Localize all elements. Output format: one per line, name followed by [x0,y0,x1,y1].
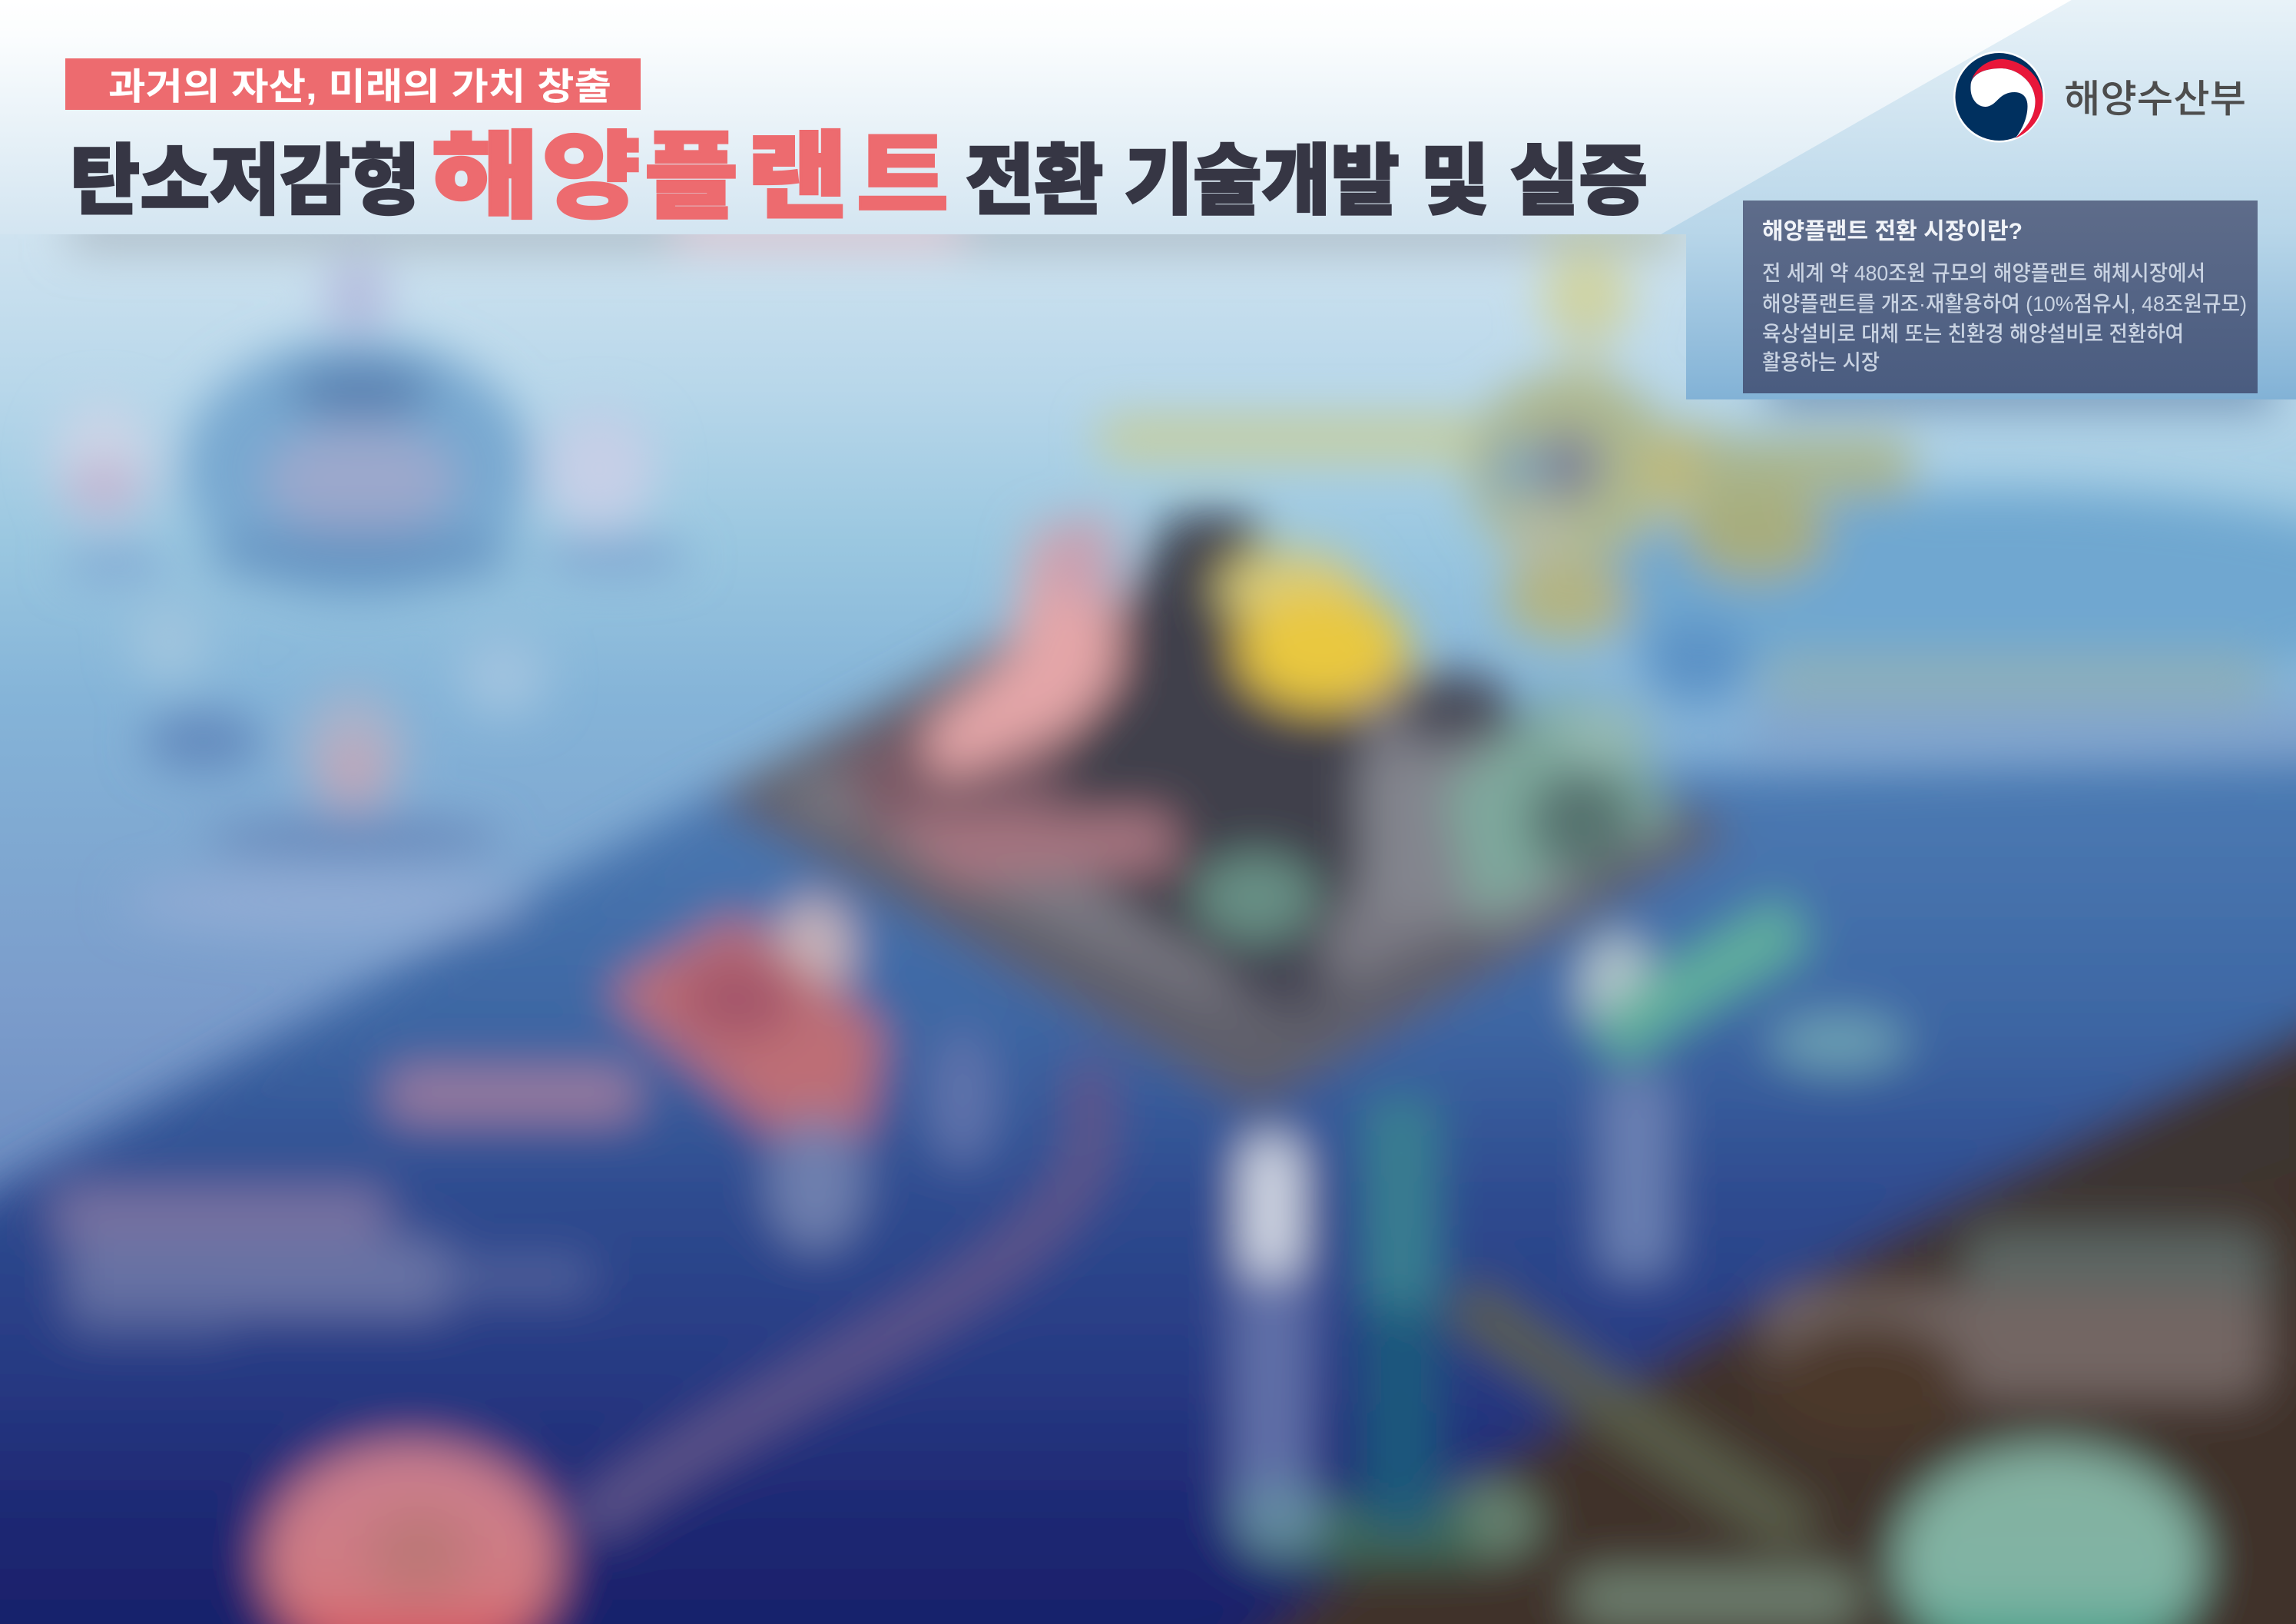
platform deck [711,515,1736,1110]
main title: 전환 기술개발 및 실증 [966,138,1648,224]
panel body text: 활용하는 시장 [1762,350,1880,374]
panel body text: 전 세계 약 480조원 규모의 해양플랜트 해체시장에서 [1762,261,2205,285]
sea surface and water [0,492,2296,1624]
blurred shadow under header [69,215,1682,250]
right blurred label [1763,653,2266,705]
red module and labels [54,898,1091,1624]
main title: 플 [644,124,738,230]
main title: 양 [542,124,641,230]
subtitle banner: 과거의 자산, 미래의 가치 창출 [108,67,611,108]
main title: 탄소저감형 [70,138,420,224]
left circular diagram [53,263,691,935]
main title: 트 [856,124,949,230]
seabed [1198,991,2296,1624]
icon: government taegeuk emblem [1953,51,2045,143]
top right corner background panel [1661,0,2296,399]
yellow energy group [1098,257,1913,641]
main title: 해 [431,124,539,230]
panel body text: 해양플랜트를 개조·재활용하여 (10%점유시, 48조원규모) [1762,292,2247,316]
ministry name: 해양수산부 [2064,78,2246,121]
main title: 랜 [747,124,848,230]
main title [70,124,1648,230]
panel heading: 해양플랜트 전환 시장이란? [1762,219,2023,244]
blurred shadow under market panel [1767,369,2274,407]
panel body text: 육상설비로 대체 또는 친환경 해양설비로 전환하여 [1762,322,2184,346]
panel: market definition [1743,201,2258,393]
header background [0,0,2072,234]
support pillars [1233,922,1907,1552]
subtitle banner [65,58,641,110]
panel body text [1762,261,2247,374]
